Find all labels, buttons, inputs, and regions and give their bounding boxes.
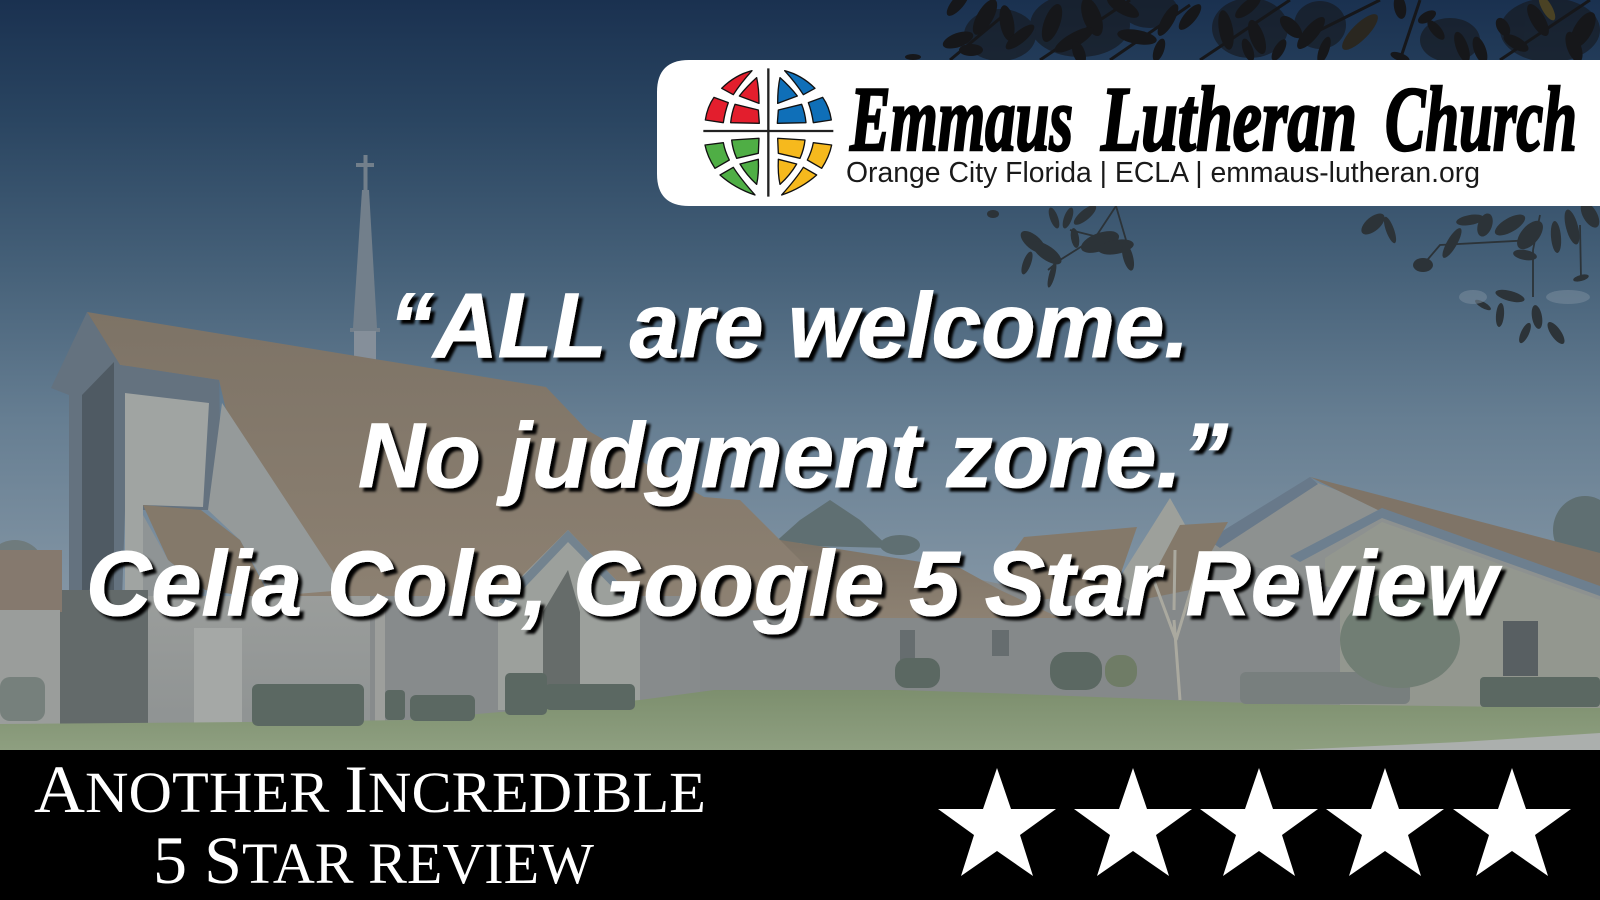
bottom band (0, 750, 1600, 900)
background: church tower and walls (0, 312, 700, 728)
logo panel (657, 60, 1600, 206)
logo title: Lutheran (1100, 68, 1357, 170)
background: steeple with cross (350, 155, 380, 367)
background: small bare tree (1150, 550, 1200, 700)
band caption line 2: 5 STAR REVIEW (153, 822, 594, 898)
quote line 2: No judgment zone.” (358, 405, 1228, 507)
background: sky (0, 0, 1600, 600)
star 2 (1074, 768, 1192, 876)
star 1 (938, 768, 1056, 876)
logo subtitle: Orange City Florida | ECLA | emmaus-lutheran.org (846, 157, 1480, 189)
background: hanging branches below logo (987, 199, 1600, 347)
background: tree branches along top (905, 0, 1600, 66)
icon: Lutheran cross and globe emblem (703, 68, 833, 197)
quote line 1: “ALL are welcome. (389, 275, 1189, 377)
background: centre wing of church (620, 498, 1340, 712)
band caption line 1: ANOTHER INCREDIBLE (34, 751, 706, 827)
star 4 (1326, 768, 1444, 876)
star 5 (1453, 768, 1571, 876)
background: right wing of church (1208, 477, 1600, 712)
background: driveway (1290, 733, 1600, 750)
logo title: Emmaus (849, 68, 1073, 170)
background: lawn (0, 690, 1600, 750)
background: pale clouds (1459, 290, 1590, 304)
background: main church roof (87, 312, 830, 612)
five star rating (938, 768, 1571, 876)
background: shrubs (0, 592, 1600, 726)
reviewer attribution: Celia Cole, Google 5 Star Review (86, 533, 1502, 635)
star 3 (1200, 768, 1318, 876)
logo title (849, 68, 1577, 170)
quote headline (86, 275, 1502, 635)
background: distant trees (0, 496, 1600, 600)
